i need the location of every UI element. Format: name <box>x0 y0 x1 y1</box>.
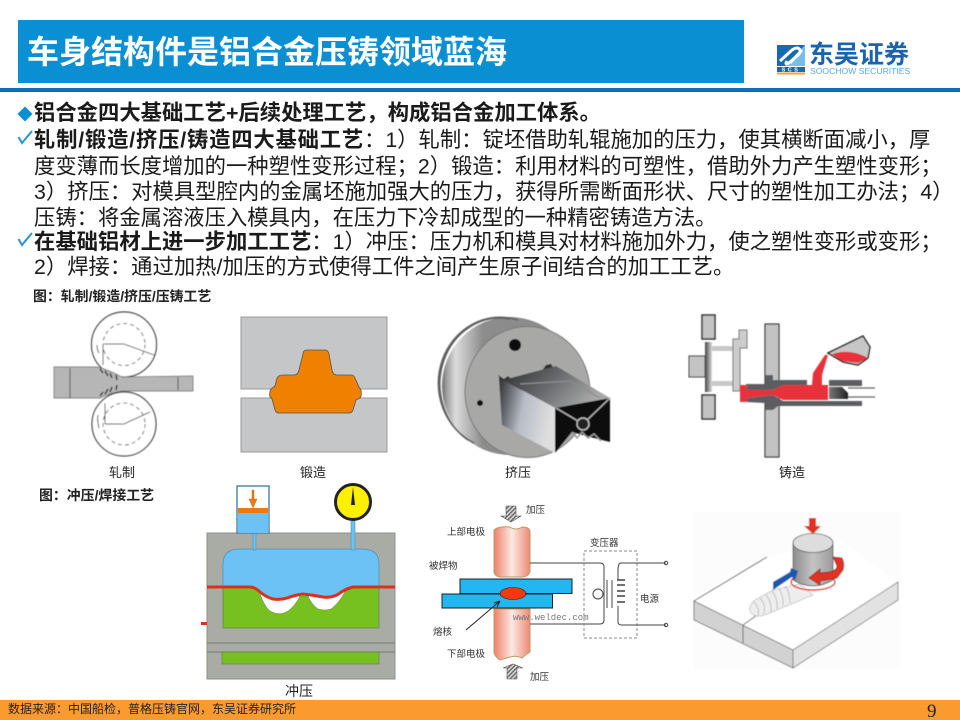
lower pad <box>222 652 379 664</box>
footer bar <box>0 700 960 720</box>
diagram: friction stir welding <box>694 512 900 669</box>
clamp blocks <box>702 315 715 339</box>
logo: Soochow Securities <box>777 41 911 76</box>
ladle <box>828 336 870 365</box>
weld nugget <box>500 588 526 600</box>
tie bars <box>712 346 733 351</box>
diagram: stamping <box>201 484 395 679</box>
labels: 变压器 <box>590 537 619 549</box>
circuit <box>530 551 668 638</box>
force arrows <box>501 506 521 522</box>
watermark: www.weldec.com <box>513 613 589 623</box>
upper roll <box>92 312 156 377</box>
figure heading 1: 图：轧制/锻造/挤压/压铸工艺 <box>33 288 211 304</box>
lower roll <box>92 392 156 456</box>
lower die <box>241 398 387 452</box>
diagram: forging <box>241 317 387 452</box>
logo name: 东吴证券 <box>809 41 909 69</box>
labels: 加压 <box>530 672 550 683</box>
white gaps <box>260 592 345 614</box>
caption: 挤压 <box>505 465 531 480</box>
blue travel arrow <box>773 568 798 590</box>
profile end <box>555 398 610 453</box>
plate left face <box>694 601 793 668</box>
workpiece <box>270 350 361 413</box>
feed channels <box>253 533 256 550</box>
press frame <box>207 533 395 679</box>
upper electrode <box>494 527 530 577</box>
logo English name: SOOCHOW SECURITIES <box>810 66 911 76</box>
statement 2: 度变薄而长度增加的一种塑性变形过程；2）锻造：利用材料的可塑性，借助外力产生塑性变形； <box>34 154 942 178</box>
die face <box>465 326 590 458</box>
statement 3: 2）焊接：通过加热/加压的方式使得工件之间产生原子间结合的加工工艺。 <box>34 255 734 279</box>
lower plate <box>442 594 552 608</box>
red force arrow <box>804 518 821 534</box>
labels: 被焊物 <box>429 560 458 572</box>
statement 3: 在基础铝材上进一步加工工艺：1）冲压：压力机和模具对材料施加外力，使之塑性变形或变形； <box>34 230 942 254</box>
profile wall <box>499 378 555 453</box>
thickness arrows <box>70 368 178 398</box>
labels: 加压 <box>526 505 546 516</box>
title banner <box>18 20 744 83</box>
figure heading 2: 图：冲压/焊接工艺 <box>39 487 154 503</box>
diagram: rolling <box>54 312 193 456</box>
body text <box>18 100 954 279</box>
opening teeth <box>498 364 556 390</box>
bullet: check <box>18 131 32 143</box>
weld track <box>750 584 813 616</box>
labels: 熔核 <box>433 626 453 638</box>
plunger <box>829 387 848 399</box>
labels: 下部电极 <box>447 648 486 660</box>
fixed platen <box>765 324 779 457</box>
title: 车身结构件是铝合金压铸领域蓝海 <box>27 34 507 70</box>
bullet: check <box>18 233 32 245</box>
shot sleeve <box>746 375 807 390</box>
plate right face <box>793 582 898 668</box>
caption: 轧制 <box>109 465 135 480</box>
statement 2 <box>34 128 954 230</box>
tool <box>793 543 833 586</box>
upper plate <box>460 579 572 594</box>
upper die <box>241 317 387 389</box>
labels: 上部电极 <box>447 526 486 538</box>
lower electrode <box>494 609 530 660</box>
statement 1: 铝合金四大基础工艺+后续处理工艺，构成铝合金加工体系。 <box>34 100 601 125</box>
side tick <box>201 622 207 625</box>
statement 3 <box>34 230 942 279</box>
logo mark: SCS <box>782 68 800 74</box>
deformation marks <box>100 369 117 396</box>
moving platen <box>689 356 705 377</box>
caption: 冲压 <box>285 683 313 699</box>
header rule <box>0 88 960 92</box>
green die <box>223 587 379 628</box>
frame seam <box>207 643 395 652</box>
caption: 铸造 <box>779 465 805 480</box>
labels: 电源 <box>640 593 660 605</box>
strip <box>54 367 193 398</box>
molten metal <box>740 355 828 402</box>
pressure gauge <box>336 484 370 520</box>
caption: 锻造 <box>300 465 326 480</box>
plate top <box>694 540 898 650</box>
statement 2: 3）挤压：对模具型腔内的金属坯施加强大的压力，获得所需断面形状、尺寸的塑性加工办法；4） <box>34 180 954 204</box>
tool shoulder ring <box>791 574 835 590</box>
diagram: die casting <box>689 315 875 457</box>
diagram: extrusion die <box>438 317 610 458</box>
source note: 数据来源：中国船检，普格压铸官网，东吴证券研究所 <box>8 701 296 716</box>
bullet: diamond <box>18 106 32 122</box>
statement 2: 压铸：将金属溶液压入模具内，在压力下冷却成型的一种精密铸造方法。 <box>34 206 717 230</box>
ring grooves <box>438 317 518 443</box>
profile top <box>503 366 610 408</box>
nugget arrow <box>466 601 500 630</box>
die body <box>442 317 578 455</box>
diagram: resistance spot welding <box>429 505 668 683</box>
die holes <box>509 339 521 351</box>
statement 2: 轧制/锻造/挤压/铸造四大基础工艺：1）轧制：锭坯借助轧辊施加的压力，使其横断面减小，厚 <box>34 128 930 152</box>
moving die <box>733 330 747 391</box>
labels <box>429 505 660 683</box>
red rotation arrow <box>809 557 844 585</box>
red sheet <box>207 587 395 599</box>
fluid chamber <box>223 549 379 599</box>
cylinder <box>237 486 269 533</box>
plate edges <box>694 557 767 643</box>
backdrop <box>694 512 900 669</box>
down arrow <box>249 490 257 508</box>
